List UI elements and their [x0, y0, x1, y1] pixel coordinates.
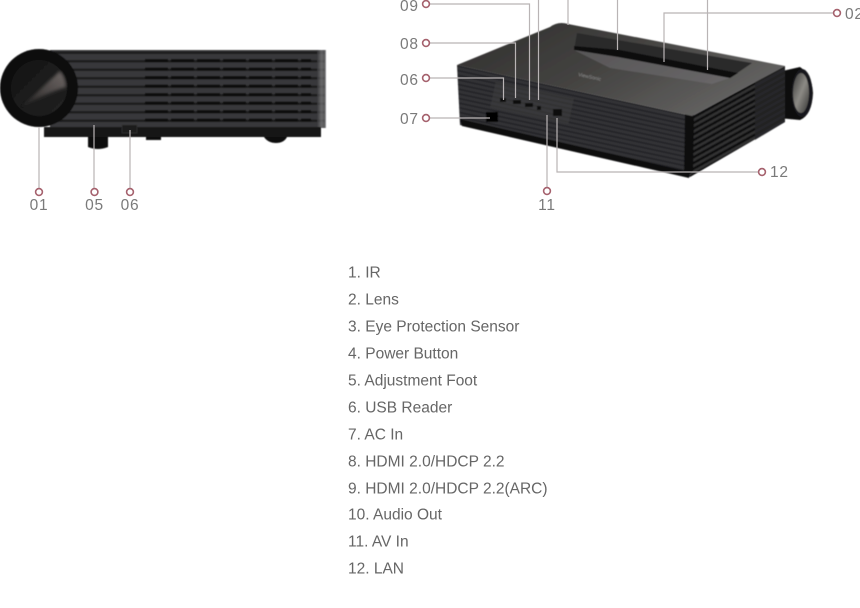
callouts for rear view: 08 [400, 36, 419, 53]
rear view corner [684, 114, 694, 177]
parts list: 10. Audio Out [348, 506, 443, 524]
callouts for rear view: 06 [400, 72, 419, 89]
callouts for side view: 01 [30, 197, 48, 214]
callouts for rear view: 11 [538, 197, 556, 214]
rear view port panel [490, 82, 574, 124]
side view base [44, 127, 321, 137]
rear view recess [574, 33, 752, 78]
side view vents [145, 54, 311, 123]
parts list: 9. HDMI 2.0/HDCP 2.2(ARC) [348, 480, 548, 498]
rear view lens [778, 67, 813, 120]
parts list: 6. USB Reader [348, 400, 452, 416]
parts list: 1. IR [348, 264, 381, 282]
parts list: 4. Power Button [348, 346, 458, 362]
parts list: 7. AC In [348, 426, 403, 444]
callouts for side view: 05 [85, 197, 104, 214]
parts list: 11. AV In [348, 534, 409, 550]
rear view front face [457, 65, 692, 177]
projector side view [0, 49, 326, 149]
rear view logo: ViewSonic [578, 72, 602, 83]
parts list [348, 264, 548, 578]
rear view AC socket [486, 112, 498, 122]
rear view side plain section [755, 66, 785, 140]
rear view side face [690, 66, 785, 177]
projector rear view [457, 23, 813, 178]
rear view slope [574, 50, 730, 84]
parts list: 8. HDMI 2.0/HDCP 2.2 [348, 454, 504, 470]
callouts for rear view: 12 [770, 164, 789, 181]
callouts for side view [30, 125, 139, 214]
rear view ports [500, 98, 562, 116]
parts list: 2. Lens [348, 292, 399, 308]
parts list: 3. Eye Protection Sensor [348, 318, 519, 336]
rear view recess shadow [574, 46, 738, 78]
side view lens [0, 49, 78, 127]
rear view top [457, 23, 785, 116]
side view body [50, 50, 325, 128]
callouts for rear view: 07 [400, 111, 419, 128]
side view port [122, 125, 137, 133]
parts list: 12. LAN [348, 560, 404, 578]
side view feet [88, 137, 287, 149]
callouts for rear view [400, 0, 860, 214]
callouts for side view: 06 [121, 197, 139, 214]
parts list: 5. Adjustment Foot [348, 372, 478, 390]
rear view base edge [460, 119, 690, 178]
side view end cap [317, 50, 326, 128]
